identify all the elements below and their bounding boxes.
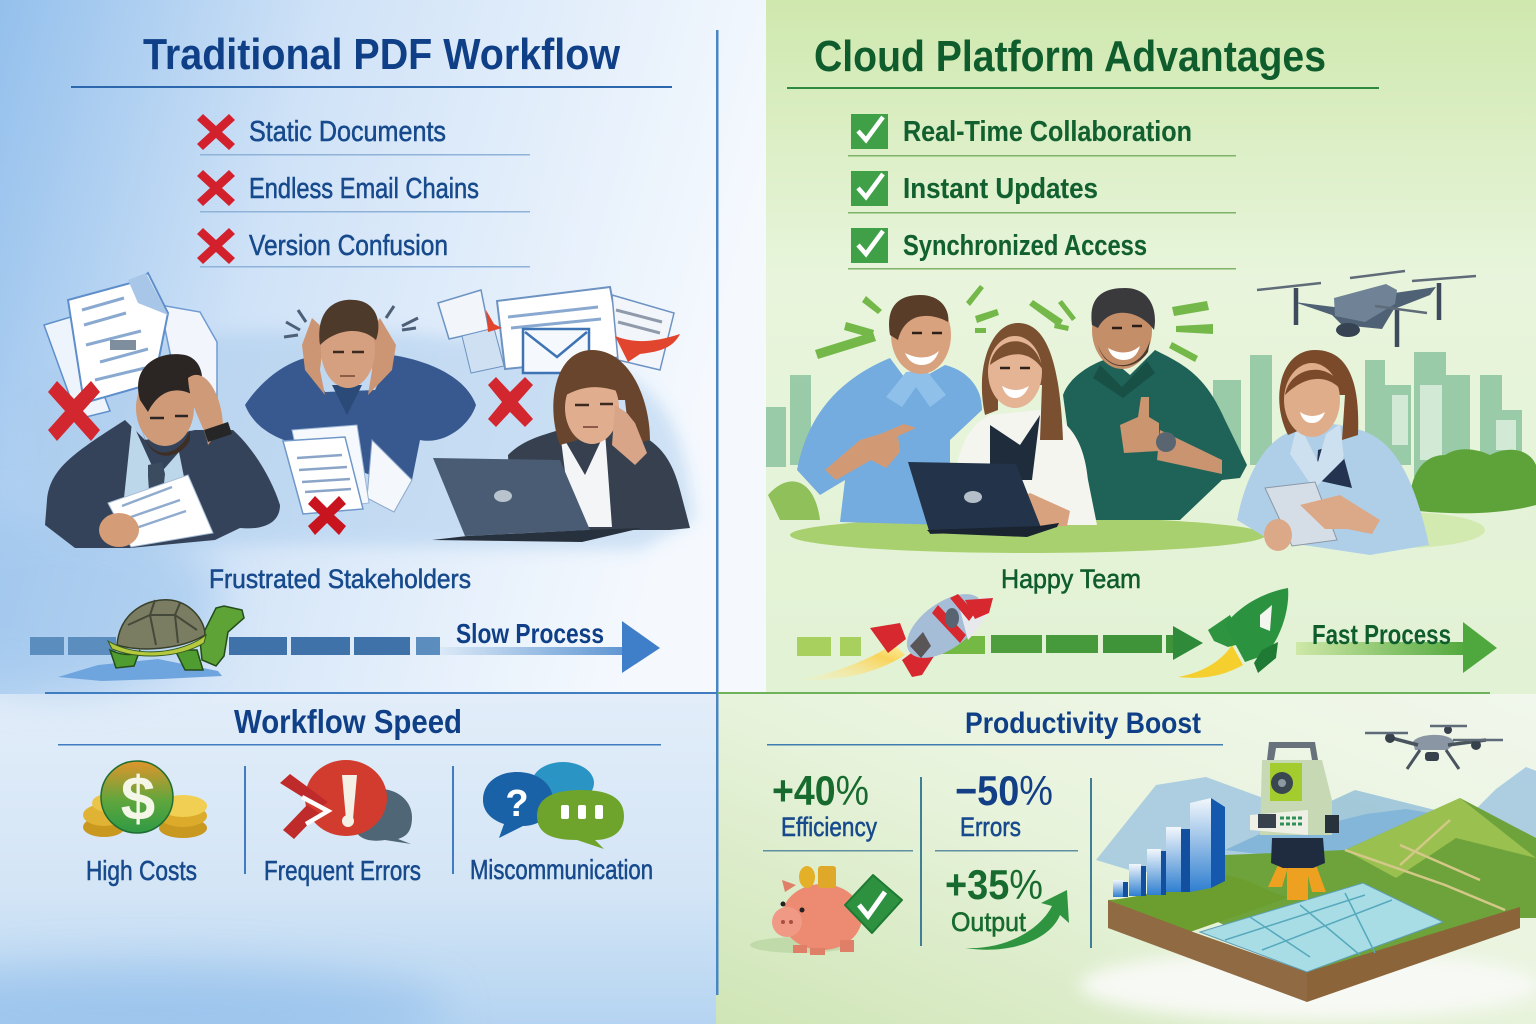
item: Static Documents: Static Documents [249,116,446,148]
item: Instant Updates: Instant Updates [903,173,1098,205]
left hill [1108,874,1290,932]
excitement marks [815,285,1213,362]
item: Endless Email Chains: Endless Email Chains [249,173,479,205]
item: Synchronized Access: Synchronized Access [903,230,1147,262]
horizontal divider right [718,692,1490,694]
horizontal divider left [45,692,717,694]
icon: red x right [488,377,533,427]
stat: +40% Efficiency: +40% [772,767,869,814]
item: Synchronized Access [848,228,1236,270]
icon: turtle [108,600,244,670]
label: Slow Process: Slow Process [456,618,604,649]
item: Real-Time Collaboration: Real-Time Collaboration [903,116,1192,148]
label: High Costs [86,855,197,886]
separators right [920,777,922,946]
title: Traditional PDF Workflow: Traditional PDF Workflow [143,30,621,79]
icon: chat bubbles: ? [505,783,529,825]
stat: -50% Errors: −50% [955,767,1053,814]
terrain block sides [1108,900,1307,1002]
ground [790,517,1266,553]
stat: +35% Output: Output [951,907,1026,937]
icon: red x left [48,381,100,441]
item: Version Confusion: Version Confusion [249,230,448,262]
bushes [1410,449,1536,513]
vertical separators left [244,766,246,874]
cost: Miscommunication [470,762,653,885]
person: woman with laptop [948,323,1097,526]
cost: Frequent Errors [264,760,421,886]
person: man in blue shirt holding head [245,300,476,490]
city skyline [766,352,1522,477]
slow process arrow [30,600,660,681]
cost: High Costs [83,761,207,886]
bar chart [1113,798,1225,897]
illustration: frustrated stakeholders [15,273,695,552]
icon: laptop left [432,458,642,542]
item: Version Confusion [197,228,530,268]
section heading: Productivity Boost: Productivity Boost [965,707,1201,740]
person: woman with tablet [1237,350,1429,555]
title: Cloud Platform Advantages: Cloud Platform Advantages [814,32,1326,81]
icon: error speech bubbles [280,760,412,844]
person: man thumbs up [1063,288,1247,520]
lake [1225,790,1475,880]
label: Miscommunication [470,854,653,885]
icon: dropped papers [283,425,412,514]
item: Instant Updates [848,171,1236,214]
background: traditional panel [0,0,766,1024]
icon: laptop team [908,462,1059,537]
icon: topographic map [1200,883,1443,972]
item: Endless Email Chains [197,170,530,212]
icon: document pile left [44,273,217,419]
person: stressed man in suit [45,354,280,548]
stat: +40% Efficiency [763,767,913,852]
mist under terrain [1080,950,1536,1020]
item: Static Documents [197,114,530,156]
stat: -50% Errors [935,767,1078,852]
icon: drone small [1365,726,1503,769]
icon: chat bubbles [483,762,624,849]
background: cloud panel [716,0,1536,1024]
distant mountains [1096,767,1536,872]
watercolor backdrop [15,331,695,552]
person: worried woman at laptop [508,350,690,530]
icon: emails [438,287,680,373]
icon: piggy bank with check [750,866,902,955]
icon: drone top [1257,271,1476,347]
illustration: survey terrain [1080,726,1536,1020]
icon: red x centre [308,496,346,535]
label: Frustrated Stakeholders: Frustrated Stakeholders [209,564,471,594]
separator 2 [452,766,454,874]
list: cloud advantages [848,114,1236,270]
stat: +35% Output [945,861,1069,950]
label: Frequent Errors [264,855,421,886]
list: traditional problems [197,114,530,268]
fast process arrows [797,582,1497,680]
person: man pointing [797,295,982,525]
separator right 2 [1090,778,1092,948]
icon: total station [1250,742,1339,900]
stat: +40% Efficiency: Efficiency [781,812,877,842]
rear hills [1210,798,1536,978]
icon: rocket large [800,582,994,680]
label: Fast Process: Fast Process [1312,619,1451,650]
central vertical divider [716,30,718,995]
icon: growth arrow [965,890,1069,950]
label: Happy Team: Happy Team [1001,564,1141,594]
section heading: Workflow Speed: Workflow Speed [234,703,462,740]
stat: -50% Errors: Errors [960,812,1021,842]
shrub left [768,481,820,520]
stat: +35% Output: +35% [945,861,1043,908]
windows [1392,385,1516,460]
illustration: happy team [766,271,1536,555]
item: Real-Time Collaboration [848,114,1236,156]
icon: rocket small [1178,588,1288,678]
icon: coins and dollar: $ [121,765,155,834]
